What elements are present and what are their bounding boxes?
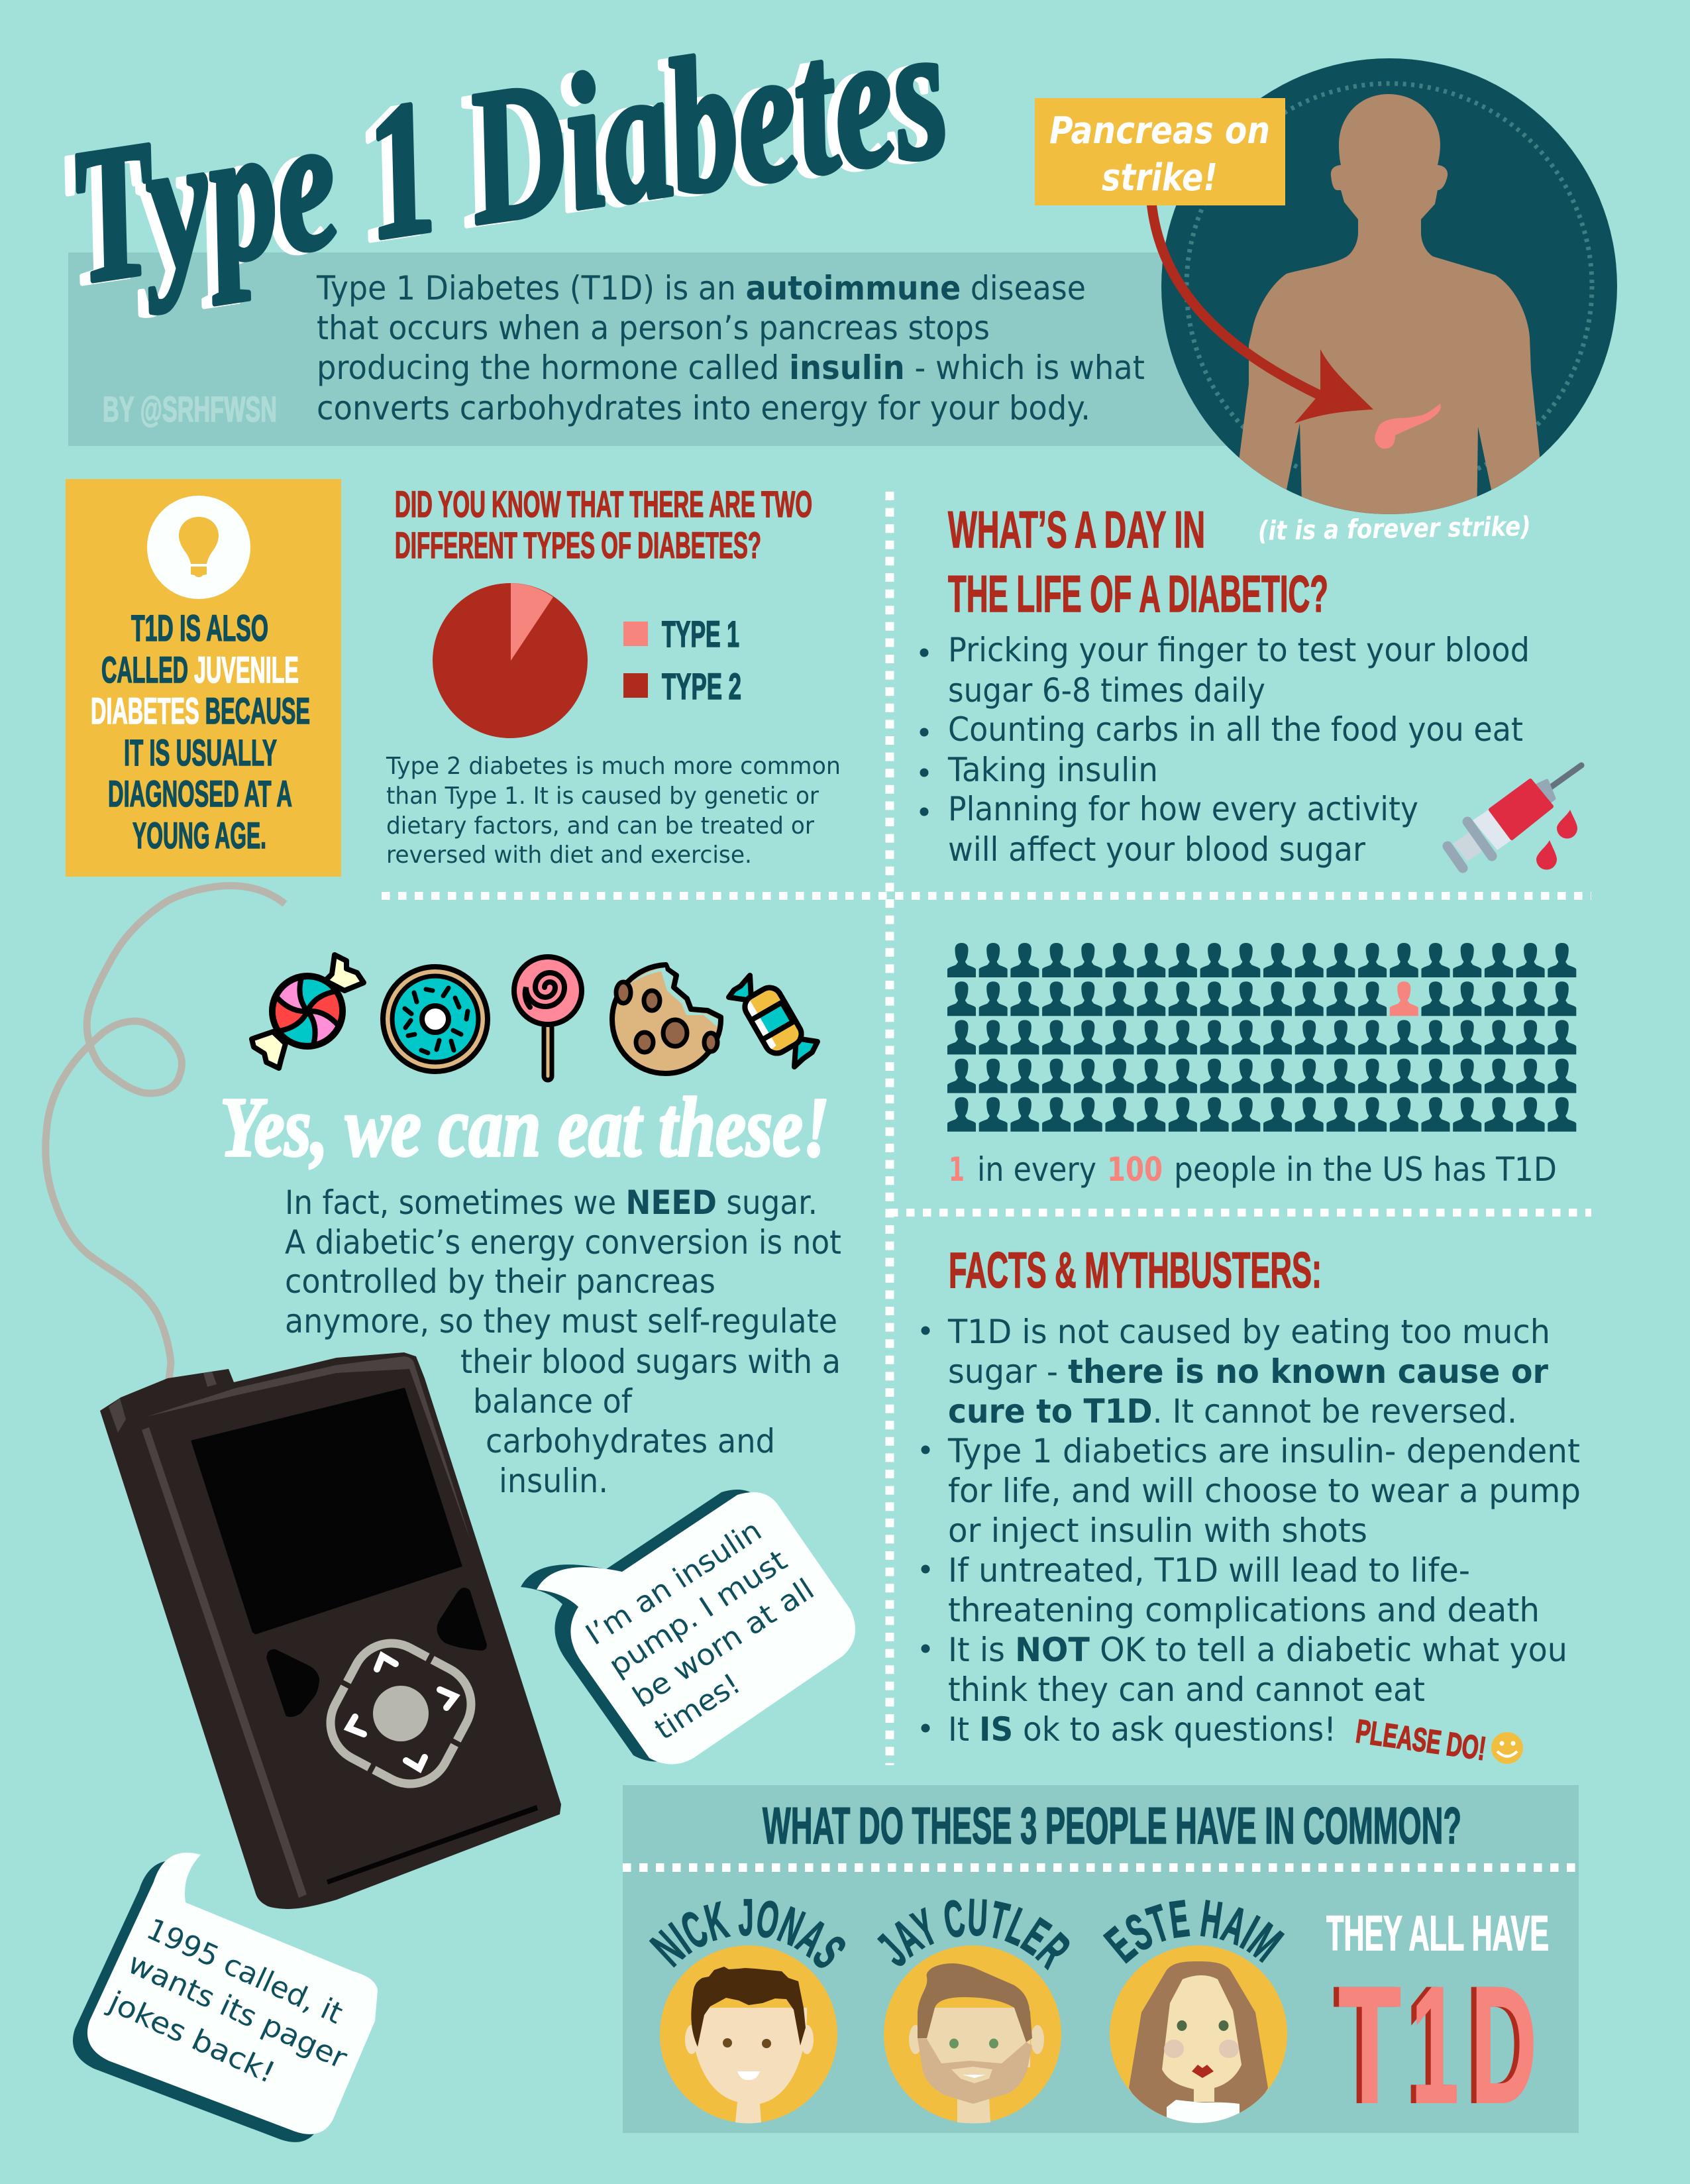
text: sugar explanation: anymore, so they must self-regulate	[285, 1302, 837, 1340]
intro text: Type 1 Diabetes (T1D) is an autoimmune disease	[316, 269, 1086, 307]
text: type 2 explanation: dietary factors, and can be treated or	[386, 812, 814, 840]
text: T1D: D	[1465, 1952, 1532, 2138]
list: a day in the life	[920, 631, 1530, 869]
text: sugar explanation: A diabetic’s energy conversion is not	[285, 1223, 841, 1262]
list: a day in the life: Pricking your finger to test your blood	[948, 631, 1530, 669]
person: Nick Jonas	[649, 1899, 845, 2123]
heading: two types of diabetes	[395, 483, 812, 566]
heading: a day in the life: THE LIFE OF A DIABETIC?	[948, 565, 1328, 623]
list: a day in the life: Counting carbs in all the food you eat	[948, 710, 1523, 749]
icon: lollipop	[514, 957, 582, 1080]
pie legend: TYPE 2	[662, 665, 741, 707]
heading: two types of diabetes: DID YOU KNOW THAT THERE ARE TWO	[395, 483, 812, 525]
speech bubble: insulin pump: pump. I must	[603, 1543, 793, 1683]
arrow: pancreas on strike	[1151, 202, 1373, 423]
list: facts and mythbusters: for life, and will choose to wear a pump	[948, 1472, 1581, 1510]
caption: forever strike: (it is a forever strike)	[1257, 512, 1531, 547]
text: sugar explanation	[285, 1183, 841, 1500]
list: a day in the life: Planning for how every activity	[948, 790, 1418, 828]
list: facts and mythbusters: cure to T1D. It cannot be reversed.	[948, 1392, 1517, 1431]
list: a day in the life: Taking insulin	[947, 751, 1158, 789]
text: T1D: T	[1338, 1952, 1401, 2138]
list: facts and mythbusters: It is NOT OK to tell a diabetic what you	[948, 1631, 1567, 1669]
speech bubble: pager joke: jokes back!	[103, 1985, 280, 2090]
panel: juvenile diabetes: YOUNG AGE.	[132, 814, 266, 856]
text: T1D	[1333, 1952, 1537, 2138]
person: Este Haim	[1102, 1900, 1287, 2123]
body diagram: silhouette in circle	[1161, 58, 1617, 530]
heading: two types of diabetes: DIFFERENT TYPES OF DIABETES?	[395, 524, 761, 566]
pump side buttons	[266, 1588, 487, 1717]
intro text	[316, 269, 1145, 427]
icon: wrapped candy	[729, 975, 818, 1067]
person: Jay Cutler	[877, 1898, 1069, 2123]
statistic: 1 in 100: 100	[1107, 1150, 1163, 1189]
list: facts and mythbusters: or inject insulin with shots	[948, 1511, 1367, 1550]
panel: juvenile diabetes	[66, 479, 341, 877]
panel: juvenile diabetes: DIABETES BECAUSE	[91, 690, 310, 732]
callout: pancreas on strike	[1035, 98, 1285, 205]
speech bubble: insulin pump	[521, 1490, 855, 1764]
intro text: producing the hormone called insulin - which is what	[317, 349, 1145, 387]
list: a day in the life: will affect your blood sugar	[948, 830, 1365, 869]
speech bubble: insulin pump: I’m an insulin	[580, 1513, 768, 1652]
list: facts and mythbusters: It IS ok to ask questions!	[948, 1710, 1336, 1749]
intro text: that occurs when a person’s pancreas stops	[317, 309, 990, 347]
intro text: converts carbohydrates into energy for your body.	[317, 389, 1090, 427]
statistic: 1 in 100: people in the US has T1D	[1174, 1150, 1557, 1189]
heading: a day in the life: WHAT’S A DAY IN	[948, 500, 1205, 559]
person: Nick Jonas: NICK JONAS	[649, 1899, 845, 1968]
speech bubble: pager joke: wants its pager	[123, 1947, 352, 2076]
text: sugar explanation: insulin.	[499, 1462, 608, 1500]
speech bubble: pager joke: 1995 called, it	[141, 1912, 348, 2031]
speech bubble: insulin pump: be worn at all	[627, 1572, 820, 1714]
panel: juvenile diabetes: IT IS USUALLY	[124, 732, 277, 773]
statistic: 1 in 100: 1	[949, 1150, 965, 1189]
text: sugar explanation: controlled by their pancreas	[285, 1262, 715, 1301]
list: a day in the life: sugar 6-8 times daily	[948, 671, 1265, 710]
icon: swirl candy	[252, 955, 364, 1068]
icon: insulin pump	[100, 1352, 561, 1909]
panel: juvenile diabetes: DIAGNOSED AT A	[108, 773, 292, 814]
text: sugar explanation: In fact, sometimes we NEED sugar.	[285, 1183, 818, 1222]
icon: lightbulb	[147, 496, 250, 599]
pump d-pad	[306, 1619, 496, 1808]
statistic: 1 in 100	[949, 1150, 1557, 1189]
list: facts and mythbusters: threatening complications and death	[948, 1591, 1540, 1629]
callout: pancreas on strike: strike!	[1102, 156, 1218, 199]
icon: donut	[383, 967, 488, 1071]
text: sugar explanation: balance of	[473, 1382, 633, 1421]
list: facts and mythbusters: T1D is not caused by eating too much	[947, 1313, 1550, 1351]
text: T1D: D	[1471, 1952, 1537, 2138]
person: Jay Cutler: JAY CUTLER	[877, 1898, 1069, 1971]
list: facts and mythbusters: Type 1 diabetics are insulin- dependent	[947, 1432, 1580, 1470]
pie legend: TYPE 1	[662, 613, 739, 655]
pancreas	[1375, 404, 1441, 449]
icon: smiley	[1491, 1732, 1523, 1764]
panel: juvenile diabetes: T1D IS ALSO	[131, 607, 268, 649]
text: T1D: 1	[1411, 1952, 1459, 2138]
list: facts and mythbusters: think they can and cannot eat	[948, 1670, 1425, 1709]
icon: syringe with blood drops	[1448, 765, 1581, 869]
text: type 2 explanation: Type 2 diabetes is much more common	[386, 753, 841, 780]
list: facts and mythbusters	[921, 1313, 1581, 1749]
person: Este Haim: ESTE HAIM	[1102, 1900, 1285, 1964]
heading: facts and mythbusters: FACTS & MYTHBUSTERS:	[949, 1242, 1322, 1299]
text: sugar explanation: their blood sugars with a	[460, 1342, 841, 1381]
text: T1D: T	[1333, 1952, 1396, 2138]
text: sugar explanation: carbohydrates and	[486, 1422, 775, 1460]
heading: a day in the life	[948, 500, 1328, 623]
cord: insulin pump tubing	[46, 886, 285, 1385]
text: type 2 explanation: than Type 1. It is caused by genetic or	[386, 783, 819, 810]
pictogram: 1 in 100 people	[947, 943, 1576, 1132]
list: facts and mythbusters: If untreated, T1D will lead to life-	[948, 1551, 1470, 1590]
text: type 2 explanation: reversed with diet and exercise.	[386, 842, 752, 869]
list: facts and mythbusters: sugar - there is no known cause or	[948, 1352, 1548, 1391]
pie legend	[623, 613, 741, 707]
icon: cookie	[612, 965, 721, 1073]
speech bubble: pager joke	[73, 1853, 378, 2142]
speech bubble: insulin pump: times!	[649, 1667, 747, 1747]
text: type 2 explanation	[386, 753, 841, 869]
callout: pancreas on strike: Pancreas on	[1049, 109, 1270, 152]
note: please do: PLEASE DO!	[1353, 1712, 1488, 1767]
intro band	[68, 252, 1234, 446]
pie chart: type 1 vs type 2	[433, 583, 588, 738]
heading: yes we can eat these: Yes, we can eat these!	[220, 1080, 829, 1174]
panel: what do these people have in common	[623, 1785, 1579, 2138]
panel: juvenile diabetes: CALLED JUVENILE	[101, 649, 299, 690]
pump screen	[192, 1389, 461, 1633]
text: T1D: 1	[1406, 1952, 1453, 2138]
statistic: 1 in 100: in every	[977, 1150, 1096, 1189]
byline: BY @SRHFWSN	[103, 390, 277, 429]
